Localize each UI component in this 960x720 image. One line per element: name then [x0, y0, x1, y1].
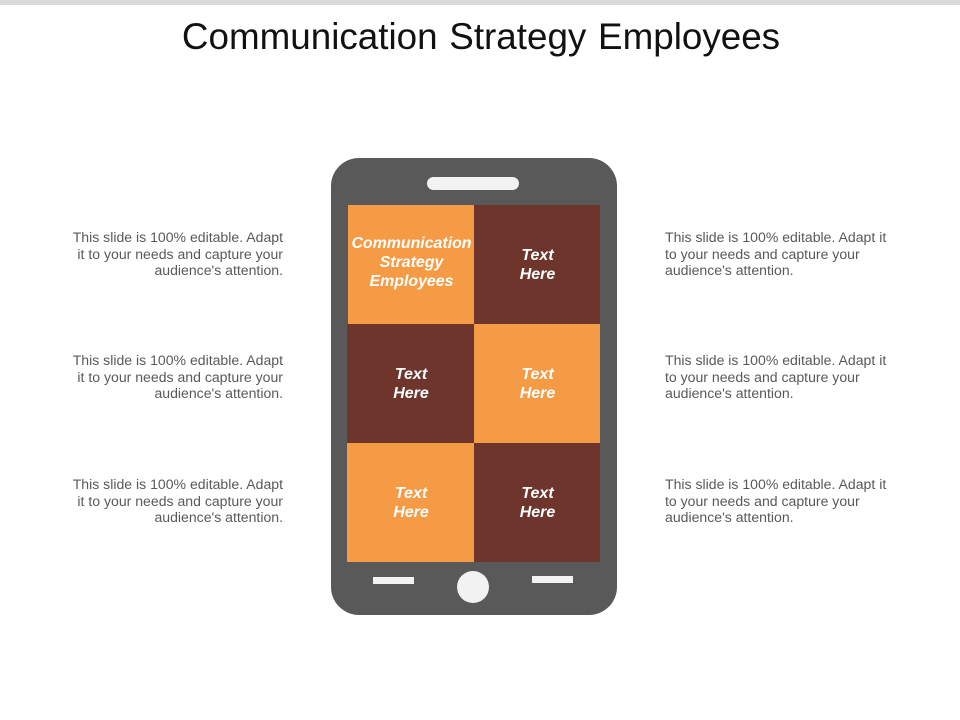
left text 3: it to your needs and capture your: [77, 492, 283, 508]
right text 2: [665, 352, 886, 401]
right text 3: This slide is 100% editable. Adapt it: [665, 476, 886, 492]
tile: communication strategy employees: Strategy: [380, 254, 443, 271]
left text 3: [73, 476, 283, 525]
tile: middle left: [347, 324, 474, 443]
tile: bottom left: [347, 443, 474, 562]
tile: top right: Here: [520, 266, 555, 283]
tile: middle right: [474, 324, 600, 443]
tile: bottom right: Here: [520, 504, 555, 521]
tile: middle right: Here: [520, 385, 555, 402]
left text 3: audience's attention.: [154, 509, 283, 525]
tile: bottom left: Here: [393, 504, 429, 521]
tile: top right: Text: [521, 247, 554, 264]
right button: [532, 576, 573, 583]
right text 2: to your needs and capture your: [665, 368, 860, 384]
left button: [373, 577, 414, 584]
left text 2: This slide is 100% editable. Adapt: [73, 352, 283, 368]
right text 3: to your needs and capture your: [665, 492, 860, 508]
right text 1: This slide is 100% editable. Adapt it: [665, 229, 886, 245]
right text 2: audience's attention.: [665, 385, 794, 401]
left text 2: audience's attention.: [154, 385, 283, 401]
top bar: [0, 0, 960, 5]
left text 3: This slide is 100% editable. Adapt: [73, 476, 283, 492]
title: Communication Strategy Employees: [182, 16, 780, 57]
left text 1: it to your needs and capture your: [77, 246, 283, 262]
tile: middle left: Text: [395, 366, 427, 383]
tile: middle right: Text: [521, 366, 554, 383]
tile: top right: [474, 205, 600, 324]
phone: [331, 158, 617, 615]
tile: communication strategy employees: Employees: [370, 273, 453, 290]
tile: bottom right: [474, 443, 600, 562]
speaker: [427, 177, 519, 190]
left text 2: it to your needs and capture your: [77, 368, 283, 384]
tile: bottom right: Text: [521, 485, 554, 502]
right text 3: audience's attention.: [665, 509, 794, 525]
right text 2: This slide is 100% editable. Adapt it: [665, 352, 886, 368]
tile: bottom left: Text: [395, 485, 427, 502]
right text 3: [665, 476, 886, 525]
home button: [457, 571, 489, 603]
left text 2: [73, 352, 283, 401]
right text 1: to your needs and capture your: [665, 246, 860, 262]
left text 1: audience's attention.: [154, 262, 283, 278]
tile: communication strategy employees: Communication: [351, 235, 472, 252]
tile: middle left: Here: [393, 385, 429, 402]
right text 1: audience's attention.: [665, 262, 794, 278]
right text 1: [665, 229, 886, 278]
left text 1: [73, 229, 283, 278]
left text 1: This slide is 100% editable. Adapt: [73, 229, 283, 245]
tile: communication strategy employees: [348, 205, 474, 324]
